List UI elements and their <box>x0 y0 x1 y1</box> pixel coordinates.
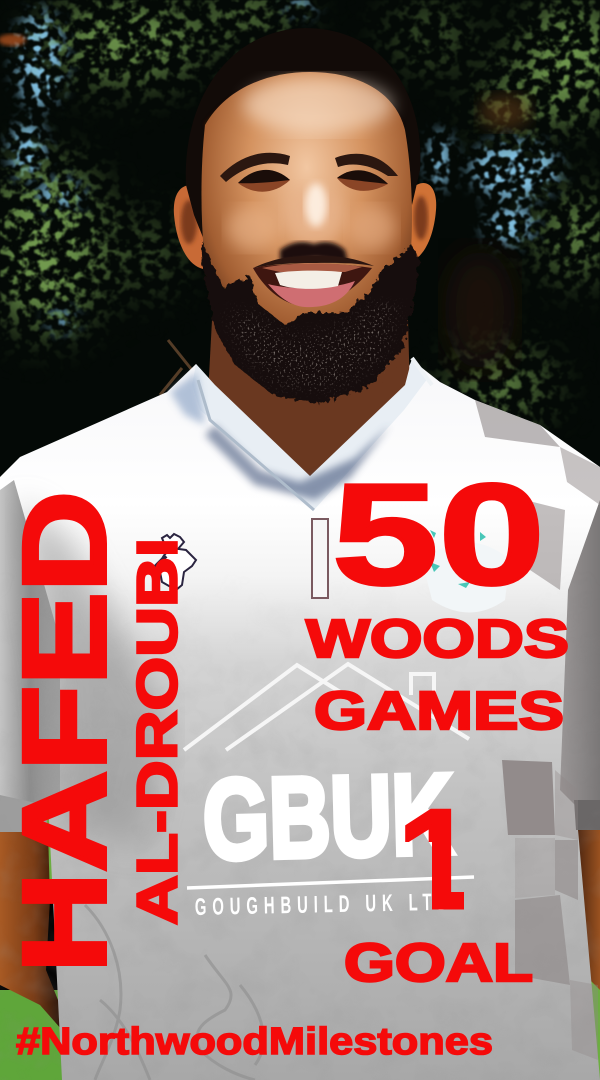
upper lip <box>262 263 362 272</box>
grass bottom left <box>0 990 70 1080</box>
stat label: GAMES: GAMES <box>314 681 564 741</box>
collar trim <box>198 380 314 510</box>
placket <box>312 519 328 598</box>
right arm <box>572 825 600 990</box>
forehead highlight <box>243 77 393 133</box>
left sleeve shading <box>0 480 60 830</box>
ear right <box>408 183 436 263</box>
beard <box>201 240 419 404</box>
left shoulder shadow <box>170 372 205 425</box>
shirt texture <box>0 830 600 1034</box>
club badge <box>422 530 510 612</box>
grass gap under left sleeve <box>40 800 75 880</box>
hashtag: #NorthwoodMilestones <box>16 1021 493 1063</box>
teeth <box>275 271 342 289</box>
hair <box>186 28 420 245</box>
checker pattern <box>475 400 600 1060</box>
nose <box>284 185 344 245</box>
lion outline print <box>85 905 263 1080</box>
collar <box>192 358 428 510</box>
kit maker lion logo <box>150 534 196 590</box>
background: dark trees <box>0 0 600 520</box>
left body shading <box>20 500 170 850</box>
ear left inner <box>181 200 197 244</box>
collar front edge <box>412 358 432 385</box>
right sleeve cuff <box>574 800 600 830</box>
grass bottom right <box>585 975 600 1080</box>
cheek highlight right <box>348 206 396 250</box>
eye right <box>337 170 388 191</box>
nose highlight <box>305 183 327 227</box>
moustache <box>253 256 374 268</box>
mouth <box>253 264 372 306</box>
ear right inner <box>414 196 428 240</box>
sponsor strapline: GOUGHBUILD UK LTD <box>195 889 454 921</box>
face <box>201 72 412 390</box>
lower lip <box>268 281 355 307</box>
eyebrow left <box>220 153 290 182</box>
neck shadow on shirt <box>205 425 390 500</box>
hairline <box>208 76 398 128</box>
nostril shadow <box>280 242 348 262</box>
stat label: WOODS: WOODS <box>306 609 569 669</box>
left arm <box>0 830 62 1030</box>
right sleeve <box>560 500 600 830</box>
head <box>174 28 436 410</box>
eyebrow right <box>335 154 398 176</box>
neck <box>208 320 410 500</box>
stat label: GOAL: GOAL <box>344 933 533 993</box>
beard grey specks <box>222 296 403 398</box>
stat number: 50: 50 <box>332 454 545 615</box>
shirt <box>0 320 600 1080</box>
stat number: 1: 1 <box>397 780 476 939</box>
sponsor logo: GBUK: GBUK <box>202 751 455 884</box>
shirt body <box>0 360 600 1080</box>
headline: HAFED: HAFED <box>0 491 131 973</box>
left sleeve cuff <box>0 795 48 832</box>
ear left <box>174 185 203 269</box>
sponsor rule <box>187 877 474 888</box>
eye left <box>238 170 290 192</box>
headline: AL-DROUBI: AL-DROUBI <box>126 538 190 925</box>
sponsor roof logo <box>184 664 469 750</box>
cheek highlight left <box>227 206 279 250</box>
